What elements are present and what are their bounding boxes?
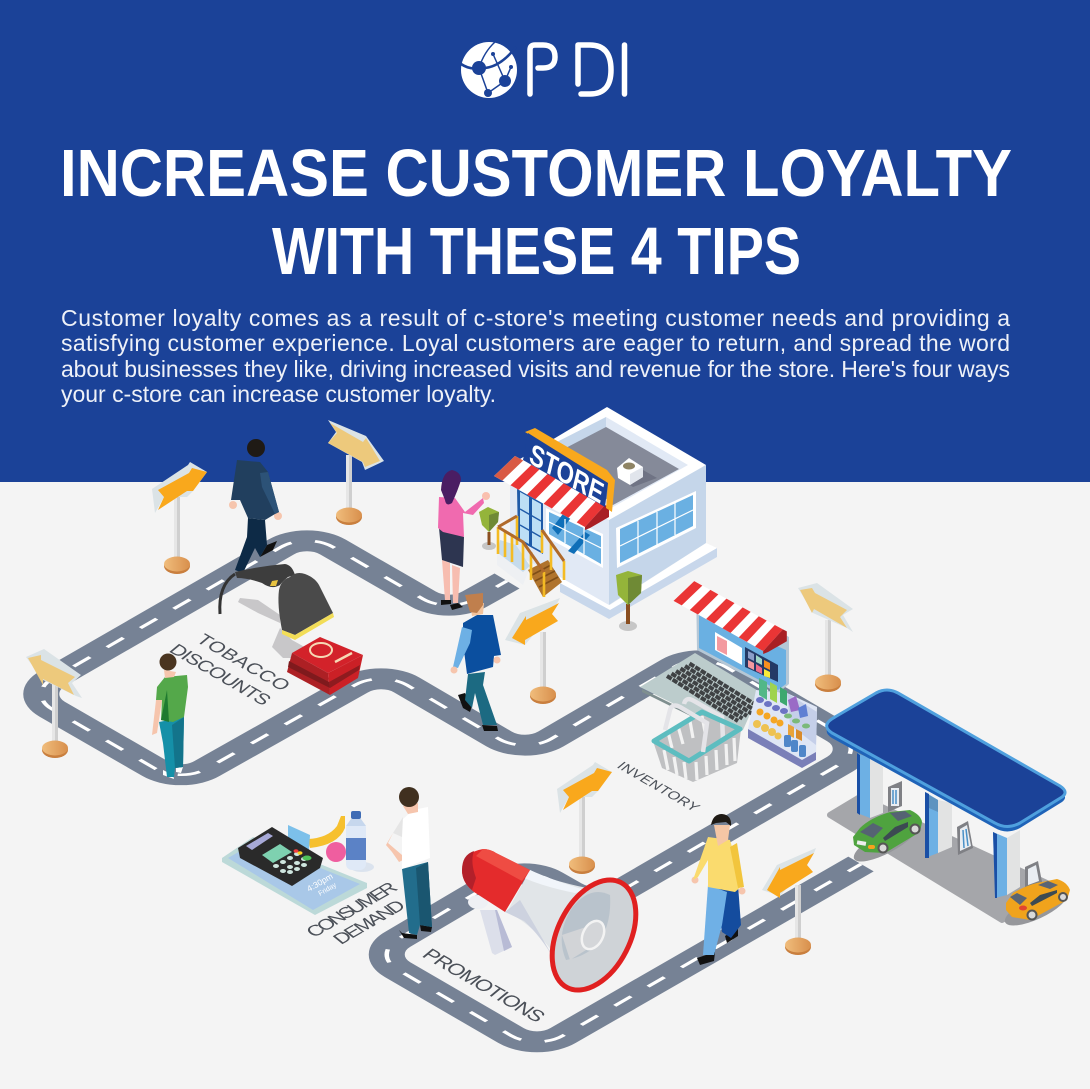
title: WITH THESE 4 TIPS (272, 214, 801, 289)
store roof (510, 407, 706, 520)
plinth (560, 548, 717, 619)
pump one (888, 781, 902, 812)
tree by stairs (479, 507, 499, 550)
icon: globe (461, 42, 517, 98)
sign: pale arrow far left (26, 649, 82, 758)
store front window (546, 508, 603, 568)
man in green shirt (152, 654, 188, 779)
green car (849, 810, 923, 869)
terminal body (238, 827, 323, 886)
laptop base and keyboard (640, 653, 760, 738)
horn (507, 870, 618, 962)
title (60, 136, 1012, 289)
icon: cigarette box (287, 637, 363, 695)
man in dark suit (229, 439, 282, 573)
store walls (609, 465, 706, 605)
PDI logo (461, 42, 624, 98)
pump two (957, 821, 973, 855)
gas station (827, 690, 1071, 932)
store side window (616, 491, 696, 568)
store door (517, 488, 543, 554)
banana (308, 816, 345, 848)
store sign: STORE (527, 437, 607, 510)
man in white shirt (386, 787, 432, 939)
laptop awning (674, 581, 787, 654)
sign: orange arrow centre (505, 598, 560, 704)
tree front of store (616, 571, 642, 631)
red barrel (462, 849, 530, 912)
apple (326, 842, 346, 862)
steps and landing (497, 516, 564, 597)
icon: laptop storefront (640, 581, 789, 738)
sign: orange arrow top left (152, 462, 207, 574)
label: promotions: PROMOTIONS (417, 946, 549, 1026)
man in blue jacket (450, 593, 501, 731)
station ground (830, 797, 1062, 920)
pillar two (925, 792, 952, 858)
woman in pink (438, 470, 490, 610)
sign: orange arrow near megaphone (557, 762, 612, 874)
icon: shopping basket (653, 699, 741, 782)
winding road (41, 541, 861, 1042)
intro paragraph: your c-store can increase customer loyalty. (61, 381, 496, 407)
label: consumer demand: DEMAND (329, 897, 410, 948)
tablet: 4:30pm (305, 871, 335, 894)
bottle (346, 811, 374, 872)
sign: orange arrow bottom right (762, 848, 816, 955)
laptop screen (696, 586, 789, 693)
intro paragraph: satisfying customer experience. Loyal customers are eager to return, and spread the word (61, 330, 1010, 356)
tablet (222, 837, 367, 915)
store awning (494, 456, 609, 530)
man in yellow shirt (692, 814, 746, 965)
roof vent (617, 458, 657, 487)
pillar one (857, 753, 883, 818)
label: inventory: INVENTORY (613, 760, 703, 815)
icon: barcode scanner (220, 564, 334, 658)
sign: pale arrow right (798, 583, 853, 692)
intro paragraph: Customer loyalty comes as a result of c-store's meeting customer needs and providing a (61, 305, 1010, 331)
icon: payment terminal (222, 811, 374, 915)
icon: megaphone (462, 849, 653, 1004)
label: consumer demand: CONSUMER (302, 879, 403, 941)
label: tobacco discounts: DISCOUNTS (164, 641, 275, 709)
store building (494, 407, 717, 619)
sign: pale arrow top (328, 420, 384, 525)
canopy (827, 690, 1065, 832)
blue header panel (0, 0, 1090, 482)
icon: product shelf (748, 678, 817, 768)
orange car (1001, 879, 1071, 932)
bell (535, 866, 653, 1004)
tablet: Friday (318, 882, 338, 898)
intro paragraph (61, 305, 1010, 407)
pillar three (993, 830, 1020, 898)
pump three (1025, 861, 1042, 888)
logo letters PDI (530, 45, 624, 94)
card (288, 825, 310, 850)
label: tobacco discounts: TOBACCO (191, 631, 294, 695)
handle (468, 895, 512, 955)
intro paragraph: about businesses they like, driving increased visits and revenue for the store. Here's four ways (61, 356, 1010, 382)
